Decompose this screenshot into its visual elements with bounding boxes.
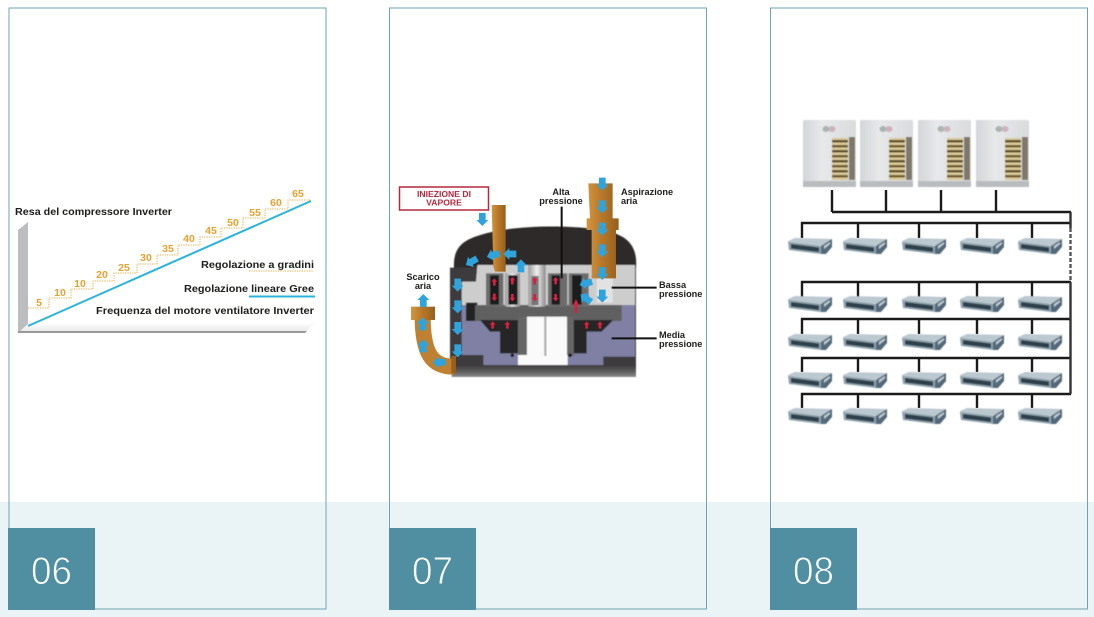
injection pipe bbox=[492, 205, 506, 272]
blue refrigerant flow arrows bbox=[417, 178, 608, 368]
compressor body bbox=[450, 227, 636, 377]
chart labels: Regolazione lineare Gree bbox=[184, 283, 314, 295]
compressor cutaway diagram bbox=[411, 178, 657, 377]
number badge 06: 06 bbox=[31, 550, 72, 593]
number badge 08 bbox=[770, 528, 857, 610]
step values bbox=[36, 188, 304, 309]
panel 07: vapour injection compressor bbox=[389, 8, 706, 610]
callout: iniezione di vapore: INIEZIONE DI bbox=[417, 189, 471, 199]
bottom band bbox=[0, 502, 1094, 617]
chart labels bbox=[15, 206, 314, 317]
linear regulation line bbox=[28, 201, 311, 326]
outdoor units bbox=[803, 120, 1029, 187]
chart: stepped versus linear regulation bbox=[15, 188, 315, 333]
compressor labels: Scarico bbox=[406, 272, 440, 282]
callout: iniezione di vapore: VAPORE bbox=[426, 198, 462, 208]
number badge 06 bbox=[8, 528, 95, 610]
discharge pipe bbox=[411, 307, 456, 373]
legend: linear sample bbox=[249, 296, 315, 298]
number badge 08: 08 bbox=[793, 550, 834, 593]
step values: 30 bbox=[140, 252, 152, 264]
step values: 40 bbox=[183, 233, 195, 245]
step values: 50 bbox=[227, 217, 239, 229]
leader lines bbox=[562, 207, 657, 338]
step values: 10 bbox=[54, 287, 66, 299]
suction pipe bbox=[587, 183, 619, 278]
step values: 45 bbox=[205, 225, 217, 237]
number badge 07: 07 bbox=[412, 550, 453, 593]
indoor units row 4 bbox=[788, 372, 1062, 388]
indoor units row 2 bbox=[788, 296, 1062, 312]
compressor labels: Media bbox=[659, 330, 686, 340]
indoor units row 3 bbox=[788, 334, 1062, 350]
compressor labels: Aspirazione bbox=[621, 187, 673, 197]
stepped regulation line bbox=[28, 200, 311, 308]
step values: 35 bbox=[162, 243, 174, 255]
compressor labels: aria bbox=[415, 281, 432, 291]
compressor labels: aria bbox=[621, 196, 638, 206]
number badge 07 bbox=[389, 528, 476, 610]
chart labels: Resa del compressore Inverter bbox=[15, 206, 172, 218]
panel 08: modular system layout bbox=[770, 8, 1088, 610]
step values: 5 bbox=[36, 297, 42, 309]
compressor labels: pressione bbox=[539, 196, 583, 206]
system wiring bbox=[802, 190, 1071, 408]
step values: 60 bbox=[270, 197, 282, 209]
chart labels: Frequenza del motore ventilatore Inverter bbox=[96, 305, 314, 317]
indoor units row 5 bbox=[788, 408, 1062, 424]
chart axes walls bbox=[18, 222, 314, 333]
indoor units row 1 bbox=[788, 238, 1062, 254]
compressor labels: pressione bbox=[659, 339, 702, 349]
compressor labels: Bassa bbox=[659, 280, 687, 290]
red pressure arrows bbox=[490, 277, 603, 329]
panel 06: inverter frequency chart bbox=[8, 8, 326, 610]
step values: 65 bbox=[292, 188, 304, 200]
compressor labels: pressione bbox=[659, 289, 702, 299]
step values: 10 bbox=[74, 278, 86, 290]
step values: 20 bbox=[96, 269, 108, 281]
step values: 55 bbox=[249, 207, 261, 219]
callout: iniezione di vapore bbox=[400, 187, 488, 210]
step values: 25 bbox=[118, 262, 130, 274]
legend: dotted stepped sample bbox=[249, 270, 314, 272]
compressor labels bbox=[406, 187, 702, 349]
chart labels: Regolazione a gradini bbox=[201, 259, 314, 271]
compressor labels: Alta bbox=[552, 187, 571, 197]
